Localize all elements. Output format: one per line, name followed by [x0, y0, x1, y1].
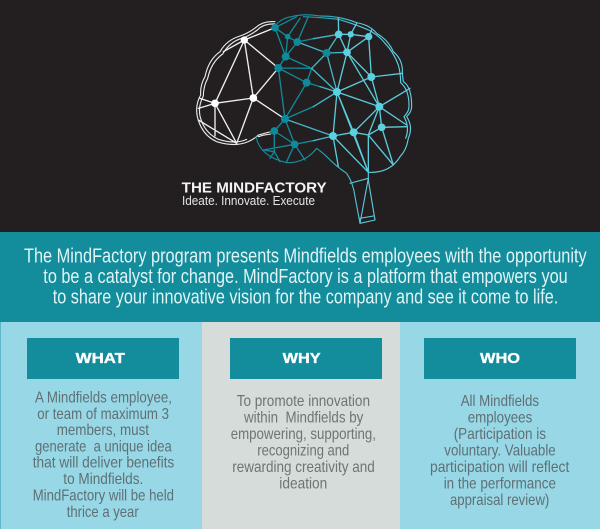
- who text: appraisal review): [450, 492, 549, 509]
- logo wordmark: [182, 180, 327, 208]
- what text: to Mindfields.: [63, 471, 143, 488]
- network nodes: white: [211, 36, 257, 107]
- icon: network brain: [197, 15, 412, 223]
- why text: empowering, supporting,: [231, 426, 376, 443]
- brain outline: white lobe: [197, 22, 275, 144]
- panel: who: [400, 322, 600, 529]
- what text: that will deliver benefits: [33, 455, 174, 472]
- why heading: WHY: [283, 351, 321, 367]
- network nodes: light teal: [329, 30, 385, 140]
- who text: in the performance: [444, 475, 556, 492]
- intro text: [24, 245, 587, 308]
- who text: participation will reflect: [430, 459, 570, 476]
- who heading: [424, 338, 576, 379]
- logo title: THE MINDFACTORY: [182, 180, 327, 196]
- who heading: WHO: [480, 351, 520, 367]
- intro panel: [0, 232, 600, 322]
- header background: [0, 0, 600, 232]
- light teal network edges: [285, 34, 347, 141]
- what text: [33, 390, 174, 521]
- who text: employees: [468, 409, 532, 426]
- why text: [231, 393, 376, 492]
- why text: recognizing and: [257, 442, 349, 459]
- why heading: [230, 338, 382, 379]
- dark teal network edges: [263, 17, 320, 162]
- what text: thrice a year: [67, 504, 139, 521]
- who text: (Participation is: [454, 426, 546, 443]
- who text: voluntary. Valuable: [444, 442, 556, 459]
- white network edges: [198, 28, 285, 143]
- what text: A Mindfields employee,: [35, 390, 172, 407]
- why text: within Mindfields by: [243, 409, 363, 426]
- panel: why: [202, 322, 400, 529]
- who text: [430, 393, 570, 509]
- why text: To promote innovation: [237, 393, 370, 410]
- what text: or team of maximum 3: [37, 406, 169, 423]
- what text: generate a unique idea: [35, 439, 172, 456]
- why text: rewarding creativity and: [232, 459, 375, 476]
- what text: members, must: [57, 422, 149, 439]
- panel: what: [0, 322, 202, 529]
- network nodes: dark teal: [270, 24, 331, 148]
- why text: ideation: [279, 475, 327, 492]
- logo tagline: Ideate. Innovate. Execute: [182, 194, 315, 208]
- who text: All Mindfields: [461, 393, 539, 410]
- what text: MindFactory will be held: [33, 488, 174, 505]
- what heading: [27, 338, 179, 379]
- what heading: WHAT: [76, 351, 125, 367]
- brain outline: teal lobe and stem: [256, 15, 412, 223]
